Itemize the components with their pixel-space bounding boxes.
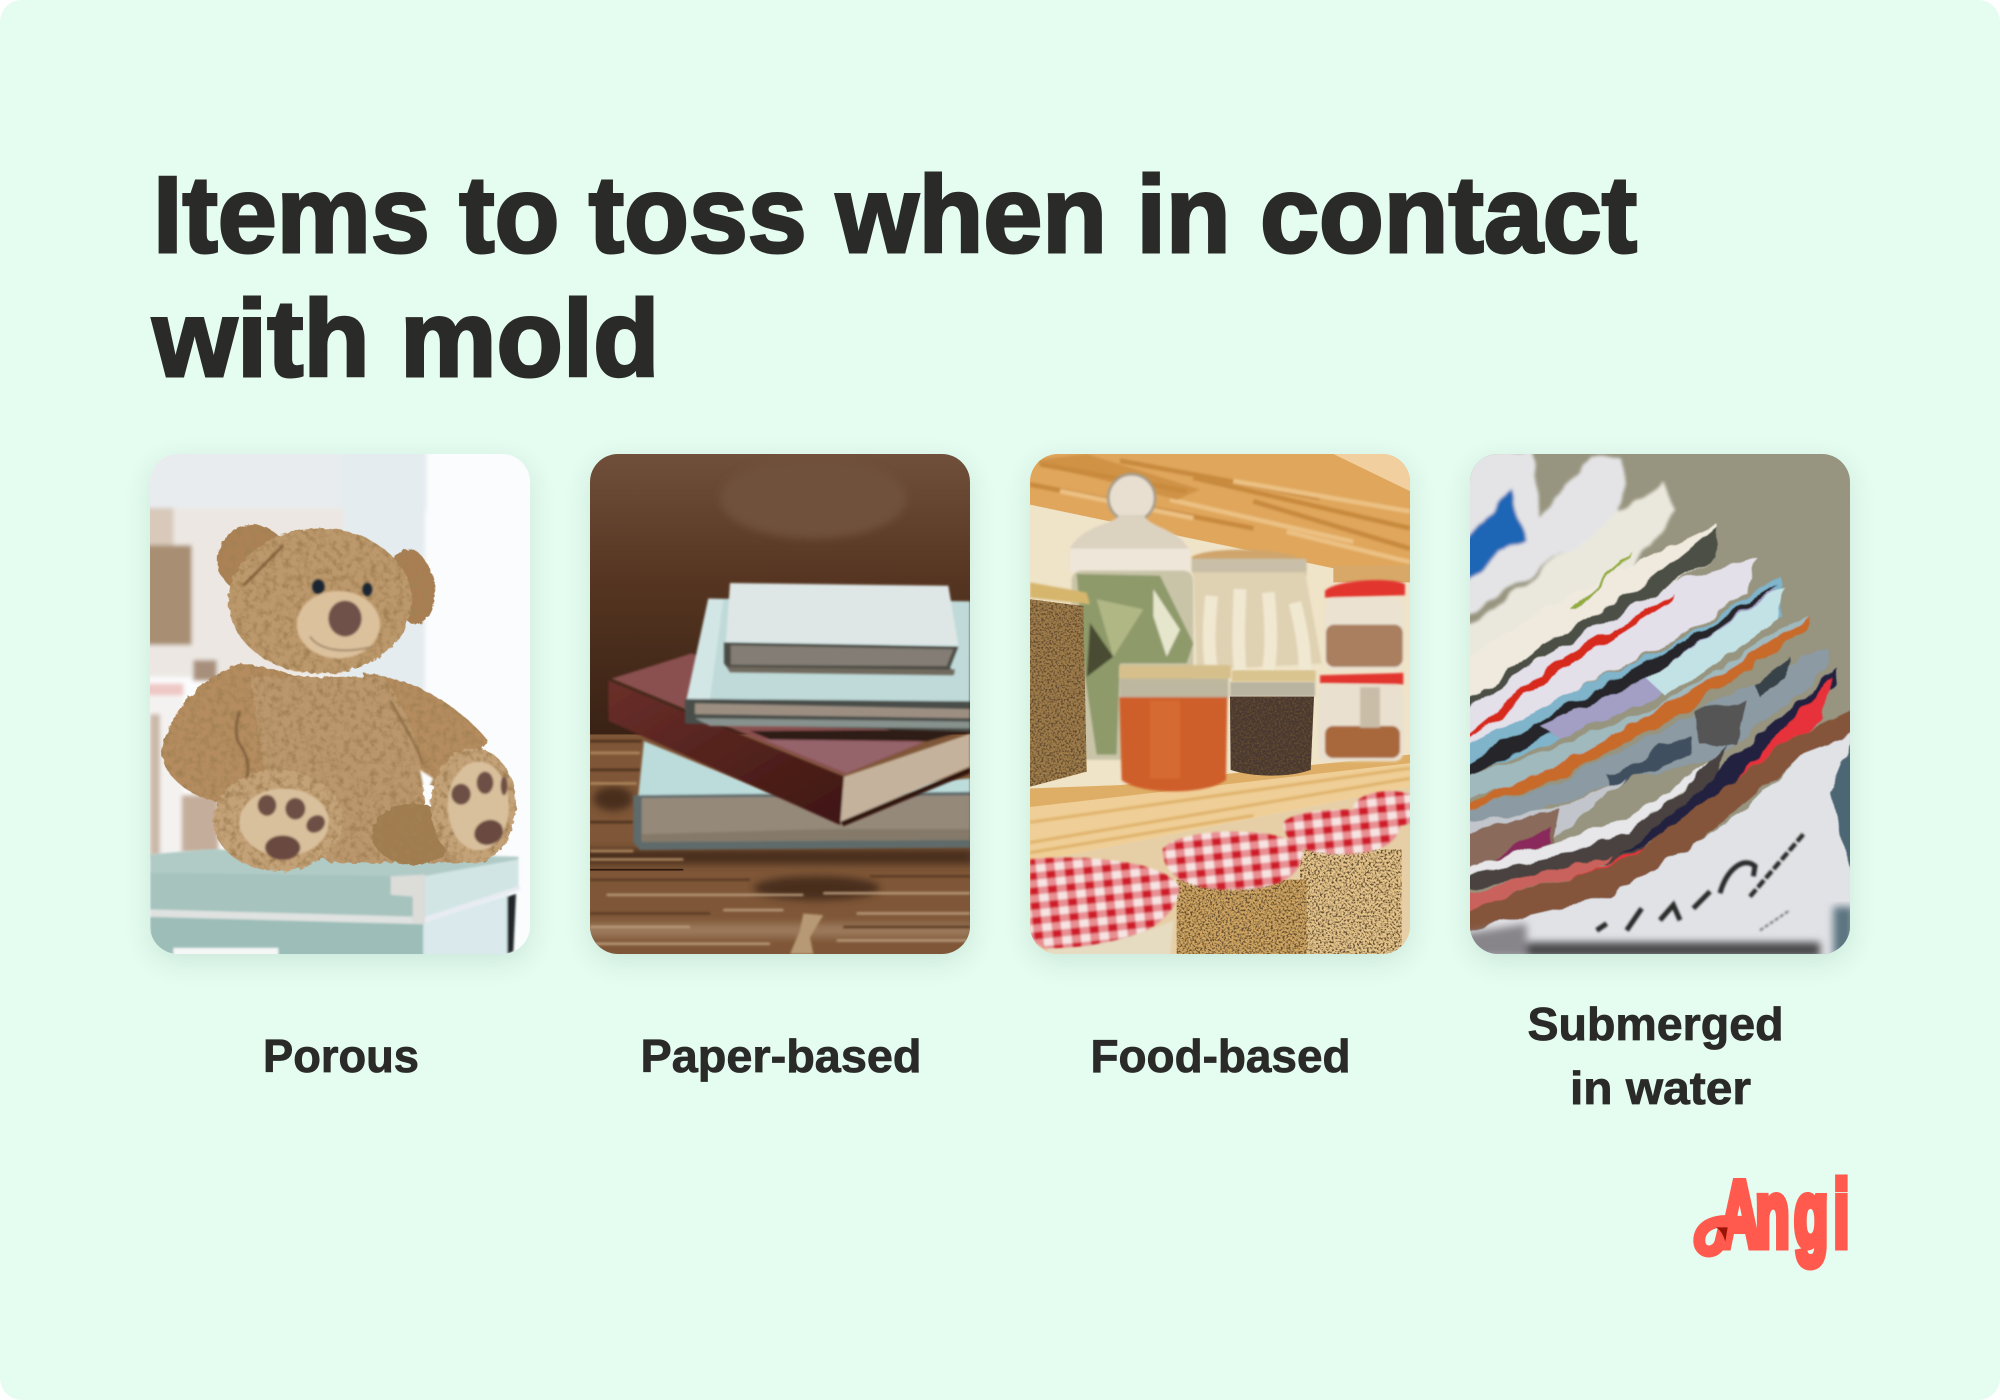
photo card: pantry jars [1030, 454, 1410, 954]
label: Submerged in water: in water [1570, 1062, 1751, 1114]
tall jar with bay leaves [1070, 474, 1193, 760]
title [150, 154, 1638, 400]
title: Items to toss when in contact [153, 154, 1637, 276]
upper shelf [1030, 454, 1410, 568]
ribbed ceramic jar [1192, 550, 1322, 670]
label: Submerged in water: Submerged [1528, 998, 1784, 1050]
teddy bear [162, 525, 516, 871]
orange spice jar [1119, 665, 1231, 791]
bottom book [633, 741, 970, 850]
printed marks on the front sheet [1597, 832, 1805, 930]
photo card: teddy bear [150, 454, 530, 954]
maroon book [608, 653, 970, 826]
left spice jar [1030, 582, 1090, 787]
photo card: stack of wet papers [1470, 454, 1850, 954]
top book [724, 583, 958, 675]
wood grain [590, 741, 970, 944]
title: with mold [152, 278, 659, 400]
middle book [685, 599, 970, 732]
label: Paper-based: Paper-based [640, 1030, 922, 1082]
red lid jars [1318, 580, 1405, 761]
photo card: stacked books [590, 454, 970, 954]
jars with gingham lids [1030, 791, 1427, 957]
label: Submerged in water [1528, 998, 1784, 1114]
label: Porous: Porous [263, 1030, 419, 1082]
paper sheets back to front [1463, 523, 1717, 724]
storage box [150, 849, 520, 958]
logo: Angi: Angi [1719, 1163, 1849, 1267]
label: Food-based: Food-based [1090, 1030, 1350, 1082]
middle shelf [1030, 755, 1410, 863]
dark peppercorn jar [1230, 670, 1316, 776]
